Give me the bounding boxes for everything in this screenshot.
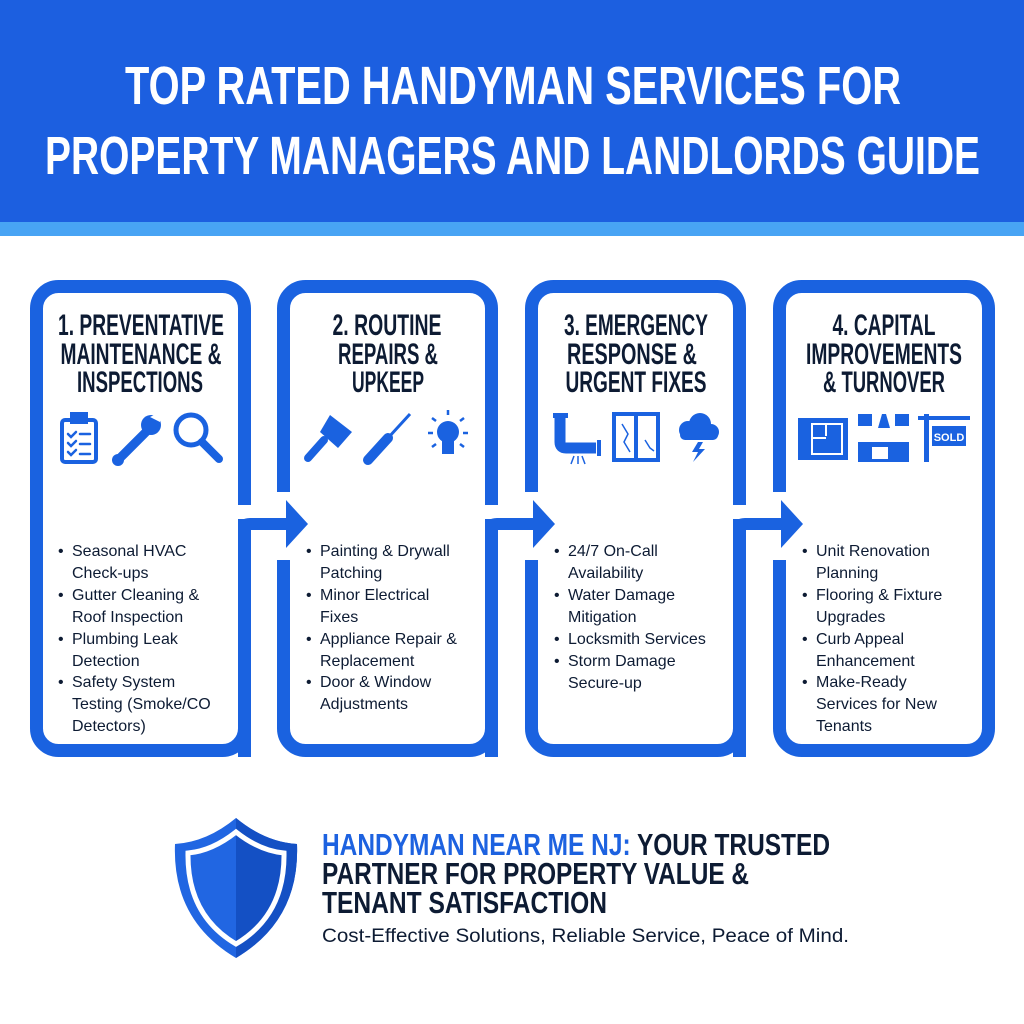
bullets: panel 3: • [554,631,560,648]
bullets: panel 4: Make-Ready [816,674,907,691]
bullets: panel 4: Planning [816,565,878,582]
icon: sold sign: SOLD [934,432,964,444]
icon: magnifier [176,415,219,459]
icon: paintbrush [308,415,352,458]
bottom headline [322,827,830,920]
bullets: panel 3: • [554,587,560,604]
panel: 1 preventative [36,286,244,750]
bullets: panel 2: Painting & Drywall [320,543,450,560]
bullets: panel 4: • [802,631,808,648]
bullets: panel 2: Fixes [320,609,358,626]
bottom headline: PARTNER FOR PROPERTY VALUE & [322,856,749,891]
title [45,56,980,186]
bullets: panel 3: Locksmith Services [568,631,706,648]
panel: 4 capital: 4. CAPITAL [832,309,936,342]
icon: screwdriver [368,414,410,460]
bullets: panel 1: Roof Inspection [72,609,183,626]
bullets: panel 2: • [306,543,312,560]
bullets: panel 4: Tenants [816,718,872,735]
bullets: panel 2: • [306,587,312,604]
bullets: panel 3: Water Damage [568,587,675,604]
bullets: panel 1: Detectors) [72,718,146,735]
panel: 3 emergency: 3. EMERGENCY [564,309,708,342]
panel: 1 preventative: MAINTENANCE & [60,338,222,371]
icon: broken window [614,414,658,460]
icons: panel 2 [308,410,468,460]
bullets: panel 3: Storm Damage [568,653,676,670]
bullets: panel 4: Upgrades [816,609,885,626]
icon: blueprint [798,418,848,460]
bullets: panel 2: • [306,631,312,648]
bullets: panel 1: Seasonal HVAC [72,543,186,560]
panel: 2 routine: UPKEEP [352,366,424,399]
bullets: panel 3: Secure-up [568,675,642,692]
bullets: panel 4: Curb Appeal [816,631,904,648]
icon: burst pipe [553,413,601,464]
icon: lightbulb [428,410,468,454]
bullets: panel 1: • [58,587,64,604]
bullets: panel 1: • [58,543,64,560]
bullets: panel 4: Flooring & Fixture [816,587,942,604]
bullets: panel 4: • [802,674,808,691]
bottom headline: TENANT SATISFACTION [322,885,607,920]
bullets: panel 3: 24/7 On-Call [568,543,658,560]
panel: 4 capital: & TURNOVER [823,366,945,399]
bullets: panel 1: Detection [72,653,140,670]
icon: storm cloud [679,413,719,462]
panel: 2 routine: 2. ROUTINE [332,309,442,342]
bullets: panel 1: Plumbing Leak [72,631,179,648]
bullets: panel 4: • [802,543,808,560]
bullets: panel 3: Mitigation [568,609,636,626]
panel: 3 emergency: RESPONSE & [567,338,697,371]
panel: 2 routine [284,286,492,750]
bullets: panel 4: Enhancement [816,653,915,670]
bullets: panel 1: Testing (Smoke/CO [72,696,211,713]
bullets: panel 4: • [802,587,808,604]
icon: wrench [112,412,161,466]
bottom headline: HANDYMAN NEAR ME NJ: YOUR TRUSTED [322,827,830,862]
bullets: panel 2: Adjustments [320,696,408,713]
bullets: panel 3: • [554,653,560,670]
bullets: panel 2: Replacement [320,653,415,670]
bullets: panel 3: Availability [568,565,643,582]
bullets: panel 4: Unit Renovation [816,543,930,560]
bullets: panel 1: Check-ups [72,565,148,582]
icons: panel 4 [798,414,970,462]
bullets: panel 2: Minor Electrical [320,587,429,604]
header banner [0,0,1024,236]
panel: 1 preventative: 1. PREVENTATIVE [58,309,224,342]
arrow: 2 to 3 [483,492,555,757]
bullets: panel 1: Gutter Cleaning & [72,587,200,604]
bullets: panel 3: • [554,543,560,560]
icon: kitchen [858,414,909,462]
icons: panel 3 [553,413,719,464]
bullets: panel 1: • [58,631,64,648]
panel: 3 emergency [532,286,740,750]
tagline: Cost-Effective Solutions, Reliable Service, Peace of Mind. [322,926,849,947]
panel: 1 preventative: INSPECTIONS [77,366,203,399]
icon: sold sign [918,414,970,462]
arrow: 1 to 2 [236,492,308,757]
bullets: panel 2 [306,543,457,713]
icon: shield [175,818,297,958]
bullets: panel 4: Services for New [816,696,937,713]
panel: 2 routine: REPAIRS & [338,338,438,371]
bullets: panel 4 [802,543,942,735]
icons: panel 1 [62,412,219,466]
bullets: panel 2: Patching [320,565,382,582]
panel: 3 emergency: URGENT FIXES [566,366,706,399]
icon: clipboard [62,414,96,462]
panel: 4 capital [780,286,988,750]
bullets: panel 1: • [58,674,64,691]
bullets: panel 1 [58,543,211,735]
bullets: panel 3 [554,543,706,692]
bullets: panel 1: Safety System [72,674,175,691]
bullets: panel 2: Door & Window [320,674,432,691]
arrow: 3 to 4 [731,492,803,757]
bullets: panel 2: • [306,674,312,691]
bullets: panel 2: Appliance Repair & [320,631,457,648]
